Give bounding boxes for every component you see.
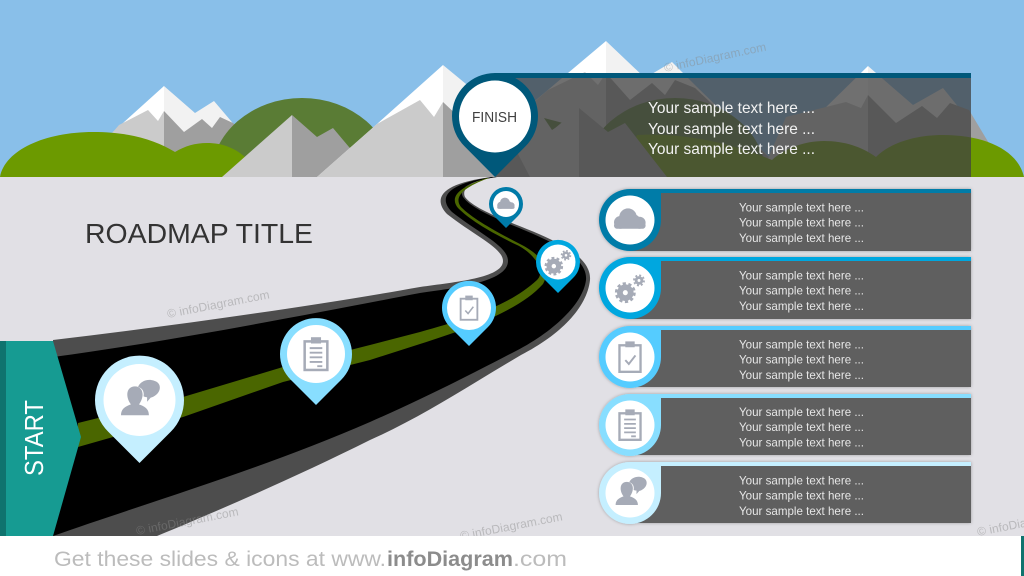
finish text: Your sample text here ... [648, 121, 815, 138]
row 2: gears: Your sample text here ... [739, 268, 864, 282]
row 4: list clipboard: Your sample text here ... [739, 405, 864, 419]
mountain large centre [317, 65, 530, 177]
pin: person on road [95, 356, 184, 463]
finish panel [495, 73, 971, 177]
ground background [0, 177, 1024, 536]
watermark top: © infoDiagram.com [663, 40, 767, 75]
start banner [0, 341, 81, 536]
finish pin [452, 73, 538, 177]
dark green hill left [211, 98, 393, 256]
row 3: check clipboard: Your sample text here ... [739, 352, 864, 366]
row 4: list clipboard: Your sample text here ... [739, 420, 864, 434]
mountain right [760, 66, 990, 177]
watermarks: © infoDiagram.com [166, 287, 271, 321]
title: ROADMAP TITLE [85, 218, 313, 249]
sky background [0, 0, 1024, 177]
footer text: .com [513, 548, 567, 571]
footer text [54, 548, 567, 571]
finish text [648, 100, 815, 158]
row 5: person: Your sample text here ... [739, 474, 864, 488]
finish label: FINISH [472, 109, 517, 126]
row 3: check clipboard [599, 326, 971, 388]
watermarks: © infoDiagram.com [135, 504, 240, 538]
footer text: Get these slides & icons at www. [54, 548, 386, 571]
footer [0, 536, 1024, 576]
mountains and hills landscape [0, 41, 1024, 256]
row 1: cloud [599, 189, 971, 251]
watermarks: © infoDiagram.com [459, 509, 564, 543]
row 4: list clipboard [599, 394, 971, 456]
row 5: person [599, 462, 971, 524]
row 3: check clipboard: Your sample text here ... [739, 368, 864, 382]
mountain group left [90, 86, 262, 177]
pin: gears on road [536, 240, 580, 293]
mountain middle [222, 115, 380, 177]
row 2: gears [599, 257, 971, 319]
start label: START [19, 400, 49, 476]
mountain behind finish panel [497, 108, 667, 177]
row 1: cloud: Your sample text here ... [739, 200, 864, 214]
road centre line [78, 178, 546, 447]
row 4: list clipboard: Your sample text here ... [739, 436, 864, 450]
row 3: check clipboard: Your sample text here ... [739, 338, 864, 352]
pin: check clipboard on road [442, 281, 496, 346]
row 5: person: Your sample text here ... [739, 504, 864, 518]
pin: list clipboard on road [280, 318, 352, 405]
row 1: cloud: Your sample text here ... [739, 216, 864, 230]
watermarks [135, 287, 1024, 543]
road [53, 177, 590, 536]
row 5: person: Your sample text here ... [739, 488, 864, 502]
light green hills right [620, 135, 1024, 177]
light green hills left [0, 132, 245, 177]
finish text: Your sample text here ... [648, 141, 815, 158]
finish text: Your sample text here ... [648, 100, 815, 117]
footer text: infoDiagram [387, 548, 513, 571]
row 1: cloud: Your sample text here ... [739, 231, 864, 245]
mountain far right peak [480, 41, 772, 177]
row 2: gears: Your sample text here ... [739, 299, 864, 313]
dark green hill right [584, 98, 766, 256]
row 2: gears: Your sample text here ... [739, 284, 864, 298]
pin: cloud on road [489, 187, 523, 228]
